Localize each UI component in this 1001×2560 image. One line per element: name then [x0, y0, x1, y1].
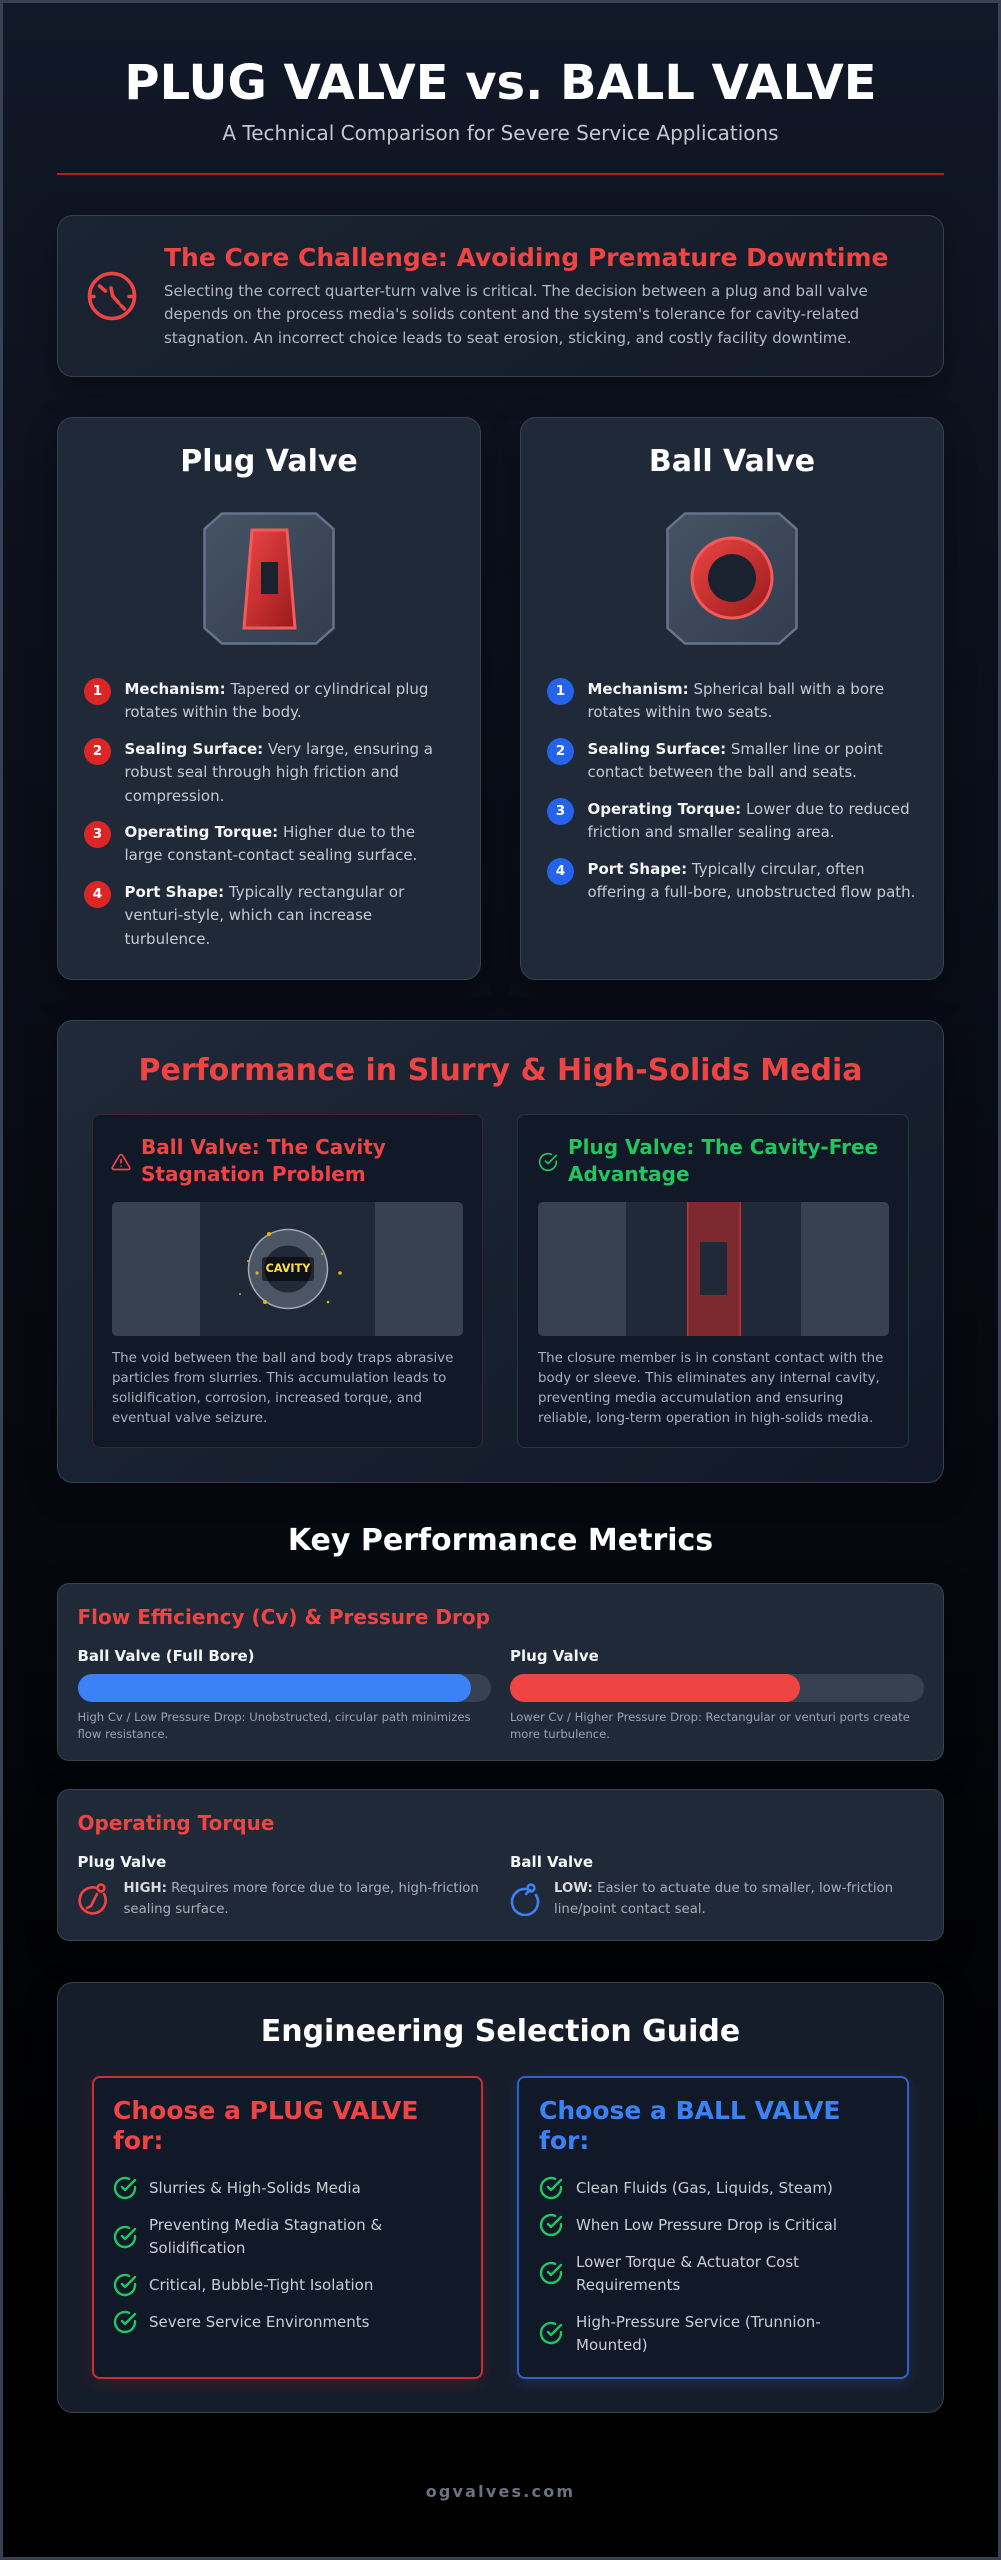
body text: body or sleeve. This eliminates any internal cavity, — [538, 1371, 880, 1386]
caption: ball valve flow — [78, 1710, 471, 1740]
icon: check — [114, 2274, 136, 2296]
feature: mechanism — [588, 680, 884, 721]
icon: check — [114, 2310, 136, 2334]
panel: plug valve cavity-free — [517, 1114, 909, 1448]
diagram: ball cavity — [112, 1202, 463, 1336]
panel: operating torque — [57, 1789, 944, 1941]
panel: plug valve — [57, 417, 481, 980]
title: PLUG VALVE vs. BALL VALVE — [124, 55, 877, 111]
body text: stagnation. An incorrect choice leads to seat erosion, sticking, and costly facility downtime. — [164, 329, 851, 347]
icon: ball valve — [666, 512, 798, 645]
heading: Plug Valve: The Cavity-Free — [568, 1135, 878, 1159]
icon: check — [540, 2262, 562, 2284]
body text — [112, 1351, 453, 1426]
label: plug valve: Plug Valve — [510, 1647, 599, 1665]
item: When Low Pressure Drop is Critical — [576, 2216, 837, 2234]
feature: port shape: venturi-style, which can increase — [124, 906, 372, 924]
bar fill 95% — [78, 1674, 470, 1702]
caption: plug valve flow — [510, 1710, 910, 1740]
section heading: key metrics: Key Performance Metrics — [288, 1523, 713, 1558]
item — [149, 2216, 382, 2257]
panel: performance in slurry — [57, 1020, 944, 1483]
panel: choose plug valve — [92, 2076, 483, 2379]
feature: port shape: Port Shape: Typically rectangular or — [124, 883, 404, 901]
item: Slurries & High-Solids Media — [149, 2179, 361, 2197]
text: low torque — [554, 1881, 893, 1916]
heading: Flow Efficiency (Cv) & Pressure Drop — [78, 1605, 490, 1629]
bar: plug valve flow — [510, 1674, 924, 1702]
item: Lower Torque & Actuator Cost — [576, 2253, 799, 2271]
body text — [538, 1351, 883, 1426]
icon: check circle — [538, 1152, 558, 1172]
subtitle: A Technical Comparison for Severe Service Applications — [222, 121, 779, 145]
badge 4: 4 — [93, 886, 102, 902]
heading — [568, 1135, 878, 1186]
heading: Plug Valve — [180, 444, 358, 479]
badge 4: 4 — [556, 863, 565, 879]
heading: Ball Valve — [649, 444, 815, 479]
item: Severe Service Environments — [149, 2313, 370, 2331]
badge 1: 1 — [93, 683, 102, 699]
icon: check — [540, 2176, 562, 2200]
icon: check — [540, 2214, 562, 2236]
feature: sealing surface — [588, 740, 883, 781]
item: Mounted) — [576, 2336, 648, 2354]
feature: operating torque — [124, 823, 417, 864]
body text: depends on the process media's solids content and the system's tolerance for cavity-related — [164, 305, 859, 323]
bar fill 70% — [510, 1674, 800, 1702]
icon: check — [540, 2322, 562, 2344]
text: high torque: sealing surface. — [124, 1902, 229, 1916]
badge 4 — [84, 881, 111, 908]
caption: ball valve flow: High Cv / Low Pressure Drop: Unobstructed, circular path minimizes — [78, 1710, 471, 1724]
feature: port shape: turbulence. — [124, 930, 210, 948]
item — [576, 2313, 821, 2354]
heading: Operating Torque — [78, 1811, 274, 1835]
heading: Choose a PLUG VALVE — [113, 2096, 418, 2125]
feature: port shape: offering a full-bore, unobstructed flow path. — [588, 883, 915, 901]
heading: Ball Valve: The Cavity — [141, 1135, 386, 1159]
icon: check — [114, 2226, 136, 2248]
badge 3 — [547, 798, 574, 825]
panel: choose ball valve — [517, 2076, 909, 2379]
text: high torque: HIGH: Requires more force due to large, high-friction — [124, 1881, 479, 1896]
heading: Stagnation Problem — [141, 1162, 366, 1186]
text: low torque: line/point contact seal. — [554, 1902, 706, 1916]
feature: operating torque: Operating Torque: Lower due to reduced — [588, 800, 910, 818]
caption: ball valve flow: flow resistance. — [78, 1726, 168, 1740]
feature: operating torque — [588, 800, 910, 841]
heading: The Core Challenge: Avoiding Premature Downtime — [164, 243, 888, 272]
feature: port shape: Port Shape: Typically circular, often — [588, 860, 865, 878]
item: Critical, Bubble-Tight Isolation — [149, 2276, 373, 2294]
heading — [113, 2096, 418, 2155]
heading: for: — [113, 2126, 163, 2155]
icon: clock gauge — [88, 272, 136, 320]
item: Solidification — [149, 2239, 245, 2257]
badge 4 — [547, 858, 574, 885]
panel: core challenge — [57, 215, 944, 377]
feature: port shape — [124, 883, 404, 948]
body text: Selecting the correct quarter-turn valve is critical. The decision between a plug and ball valve — [164, 282, 868, 300]
icon: plug valve — [203, 512, 335, 645]
feature: sealing surface: contact between the ball and seats. — [588, 763, 857, 781]
caption: plug valve flow: more turbulence. — [510, 1726, 610, 1740]
panel: flow efficiency — [57, 1583, 944, 1761]
feature: mechanism: rotates within two seats. — [588, 703, 772, 721]
icon: high torque gauge — [78, 1883, 108, 1915]
feature list — [547, 678, 915, 901]
body text: The void between the ball and body traps abrasive — [112, 1351, 453, 1366]
feature: sealing surface: Sealing Surface: Very large, ensuring a — [124, 740, 433, 758]
body text: The closure member is in constant contact with the — [538, 1351, 883, 1366]
feature: sealing surface: compression. — [124, 787, 224, 805]
feature: port shape — [588, 860, 915, 901]
feature: mechanism: Mechanism: Spherical ball with a bore — [588, 680, 884, 698]
feature: sealing surface — [124, 740, 433, 805]
heading: Performance in Slurry & High-Solids Media — [138, 1053, 862, 1088]
badge 3: 3 — [556, 803, 565, 819]
badge 1: 1 — [556, 683, 565, 699]
body text: preventing media accumulation and ensuring — [538, 1391, 843, 1406]
badge 3: 3 — [93, 826, 102, 842]
text: high torque — [124, 1881, 479, 1916]
feature: sealing surface: robust seal through high friction and — [124, 763, 399, 781]
icon: check — [114, 2176, 136, 2200]
icon: low torque gauge — [510, 1883, 540, 1916]
badge 1 — [547, 678, 574, 705]
feature: mechanism — [124, 680, 428, 721]
feature: operating torque: friction and smaller sealing area. — [588, 823, 835, 841]
panel: selection guide — [57, 1982, 944, 2413]
body text: reliable, long-term operation in high-solids media. — [538, 1411, 873, 1426]
label: cavity — [262, 1257, 314, 1281]
badge 2 — [547, 738, 574, 765]
item: High-Pressure Service (Trunnion- — [576, 2313, 821, 2331]
label: ball valve: Ball Valve — [510, 1853, 593, 1871]
body text — [164, 282, 868, 347]
text: low torque: LOW: Easier to actuate due to smaller, low-friction — [554, 1881, 893, 1896]
item: Clean Fluids (Gas, Liquids, Steam) — [576, 2179, 833, 2197]
body text: eventual valve seizure. — [112, 1411, 267, 1426]
label: cavity: CAVITY — [266, 1262, 310, 1275]
body text: solidification, corrosion, increased torque, and — [112, 1391, 422, 1406]
label: ball valve: Ball Valve (Full Bore) — [78, 1647, 254, 1665]
heading: Choose a BALL VALVE — [539, 2096, 840, 2125]
heading: Engineering Selection Guide — [261, 2014, 740, 2049]
label: plug valve: Plug Valve — [78, 1853, 166, 1871]
panel: ball valve — [520, 417, 944, 980]
badge 2 — [84, 738, 111, 765]
feature: mechanism: Mechanism: Tapered or cylindrical plug — [124, 680, 428, 698]
body text: particles from slurries. This accumulation leads to — [112, 1371, 446, 1386]
bar: ball valve flow — [78, 1674, 490, 1702]
badge 3 — [84, 821, 111, 848]
item: Preventing Media Stagnation & — [149, 2216, 382, 2234]
item — [576, 2253, 799, 2294]
feature: operating torque: large constant-contact sealing surface. — [124, 846, 417, 864]
heading: Advantage — [568, 1162, 690, 1186]
badge 2: 2 — [556, 743, 565, 759]
feature list — [84, 678, 433, 948]
icon: warning — [111, 1154, 131, 1170]
badge 1 — [84, 678, 111, 705]
diagram: plug no cavity — [538, 1202, 889, 1336]
heading — [141, 1135, 386, 1186]
heading — [539, 2096, 840, 2155]
panel: ball valve cavity problem — [92, 1114, 483, 1448]
feature: mechanism: rotates within the body. — [124, 703, 302, 721]
feature: operating torque: Operating Torque: Higher due to the — [124, 823, 415, 841]
heading: for: — [539, 2126, 589, 2155]
footer: ogvalves.com — [426, 2482, 575, 2501]
badge 2: 2 — [93, 743, 102, 759]
feature: sealing surface: Sealing Surface: Smaller line or point — [588, 740, 883, 758]
caption: plug valve flow: Lower Cv / Higher Pressure Drop: Rectangular or venturi ports create — [510, 1710, 910, 1724]
item: Requirements — [576, 2276, 680, 2294]
